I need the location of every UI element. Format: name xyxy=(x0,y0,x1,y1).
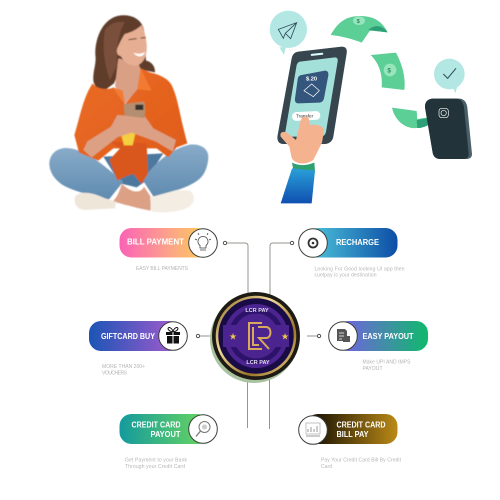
pill: recharge: RECHARGE xyxy=(336,238,379,247)
pill: credit card bill pay xyxy=(299,414,398,444)
icon: chart monitor xyxy=(299,416,327,444)
phone payment illustration xyxy=(270,11,472,203)
shoes xyxy=(75,193,116,210)
pill: bill payment xyxy=(120,228,217,258)
caption: easy payout: Make UPI AND IMPS xyxy=(362,360,411,366)
badge text: LCR PAY xyxy=(245,308,269,314)
receiving phone xyxy=(425,99,472,159)
pill: bill payment: BILL PAYMENT xyxy=(127,238,184,246)
caption: credit card payout: Get Payment to your Bank xyxy=(125,458,188,464)
jeans xyxy=(103,153,163,187)
banknote top xyxy=(331,16,388,43)
caption: easy payout second line: PAYOUT xyxy=(362,366,382,372)
stars: ★ xyxy=(229,332,237,342)
logo monogram xyxy=(249,323,270,349)
hair xyxy=(93,15,155,93)
banknote middle: $ xyxy=(387,68,391,75)
caption: recharge second line: cuelpay is your destination xyxy=(314,272,377,278)
caption: credit card payout second line: Through your Credit Card xyxy=(125,464,185,470)
pill: giftcard buy: GIFTCARD BUY xyxy=(101,332,156,341)
speech bubble: paper plane xyxy=(270,11,307,55)
banknote middle xyxy=(371,53,405,90)
icon: magnifier xyxy=(189,415,217,443)
hand with finger xyxy=(280,117,324,203)
banknote bottom xyxy=(392,108,437,128)
banknote top: $ xyxy=(357,19,361,25)
icon: payout document xyxy=(329,322,357,350)
pill: easy payout: EASY PAYOUT xyxy=(362,332,414,341)
orange shirt xyxy=(74,68,187,161)
pill: credit card bill pay: BILL PAY xyxy=(336,430,369,439)
caption: giftcard buy: MORE THAN 200+ xyxy=(102,364,145,370)
arms and hands xyxy=(83,115,176,157)
caption: credit card bill pay second line: Card xyxy=(321,464,332,470)
caption: giftcard buy second line: VOUCHERS xyxy=(102,370,128,376)
pill: giftcard buy xyxy=(89,321,187,351)
center badge: LCR Pay: LCR PAY xyxy=(246,360,270,366)
amount card: $.20 xyxy=(306,77,317,83)
icon: gift box xyxy=(159,322,187,350)
center badge: LCR Pay xyxy=(210,292,300,383)
caption: credit card bill pay: Pay Your Credit Card Bill By Credit xyxy=(321,458,402,464)
woman sitting with phone xyxy=(49,15,208,212)
icon: target disc xyxy=(299,229,327,257)
connector lines xyxy=(196,241,321,429)
ankles xyxy=(113,184,151,211)
caption: recharge: Looking For Good looking UI app then xyxy=(314,266,405,272)
pill: credit card payout: PAYOUT xyxy=(150,430,181,439)
face xyxy=(117,25,147,66)
neck xyxy=(115,58,142,103)
icon: light bulb xyxy=(189,229,217,257)
sending phone xyxy=(277,47,347,144)
pill: credit card bill pay: CREDIT CARD xyxy=(336,420,386,430)
phone xyxy=(124,101,145,118)
caption: bill payment: EASY BILL PAYMENTS xyxy=(136,266,189,272)
speech bubble: check xyxy=(434,59,465,93)
center badge: LCR Pay: ★ xyxy=(281,332,289,342)
pill: credit card payout: CREDIT CARD xyxy=(132,420,181,430)
pill: credit card payout xyxy=(120,414,217,444)
pill: easy payout xyxy=(329,321,428,351)
pill: recharge xyxy=(299,228,398,258)
transfer button: Transfer xyxy=(296,114,314,119)
